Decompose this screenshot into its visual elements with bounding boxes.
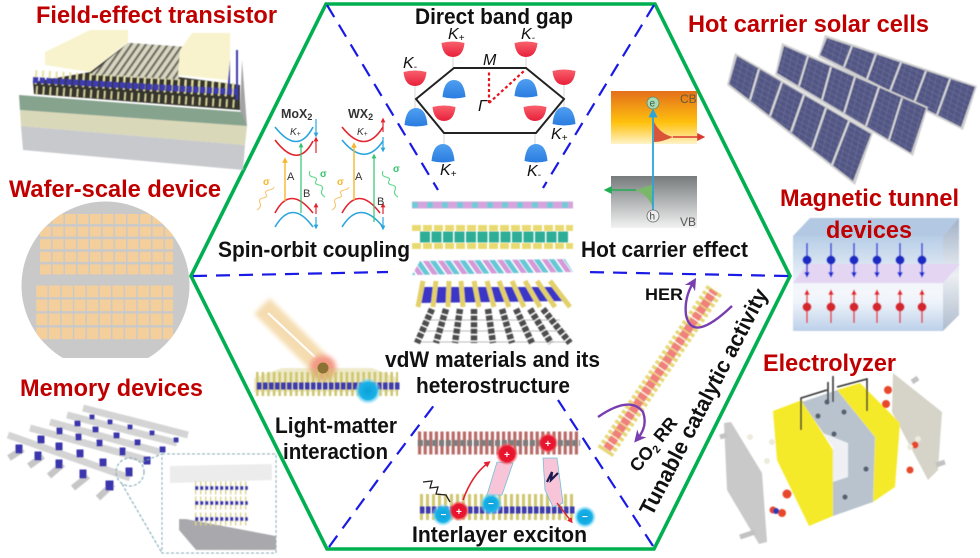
diagram: spin-orbit band structure: σ [320, 169, 327, 180]
title: memory devices: Memory devices [20, 375, 203, 402]
label: HER: HER [645, 285, 683, 304]
diagram: spin-orbit band structure: + [364, 131, 368, 138]
diagram: interlayer exciton: + [545, 439, 551, 450]
heading: hot carrier effect: Hot carrier effect [581, 237, 749, 262]
title: magnetic tunnel devices [780, 185, 959, 244]
hexagon frame [191, 4, 790, 549]
diagram: spin-orbit band structure: K [357, 127, 364, 138]
illustration: memory crossbar [8, 408, 276, 553]
title: magnetic tunnel devices: Magnetic tunnel [780, 185, 959, 212]
diagram: spin-orbit band structure: MoX [281, 107, 307, 121]
diagram: spin-orbit band structure [257, 107, 400, 228]
title: wafer-scale device: Wafer-scale device [9, 176, 221, 203]
diagram: spin-orbit band structure: A [355, 171, 363, 183]
illustration: magnetic tunnel device [793, 218, 960, 331]
diagram: spin-orbit band structure: 2 [368, 112, 373, 122]
title: electrolyzer: Electrolyzer [763, 350, 896, 377]
diagram: interlayer exciton: − [488, 499, 494, 510]
diagram: catalytic nanoribbon [598, 283, 732, 452]
diagram: Brillouin zone with valleys: K [551, 126, 562, 143]
diagram: spin-orbit band structure: WX [348, 107, 368, 121]
diagram: spin-orbit band structure: 2 [307, 112, 312, 122]
diagram: spin-orbit band structure: σ [393, 164, 400, 175]
diagram: spin-orbit band structure: B [377, 196, 384, 208]
diagram: spin-orbit band structure: σ [337, 177, 344, 188]
diagram: Brillouin zone with valleys: + [562, 133, 568, 144]
heading: interlayer exciton: Interlayer exciton [412, 522, 587, 547]
label: CO2 RR: CO [626, 442, 658, 476]
label: CO2 RR: 2 [650, 443, 664, 456]
title: field-effect transistor: Field-effect transistor [36, 2, 277, 29]
diagram: vdW heterostructure stack [412, 205, 573, 343]
diagram: Brillouin zone with valleys: K [403, 55, 414, 72]
diagram: hot carrier effect: h [650, 212, 655, 222]
illustration: electrolyzer [720, 373, 945, 544]
diagram: Brillouin zone with valleys: - [532, 33, 536, 44]
heading: tunable catalytic activity: Tunable catalytic activity [634, 284, 773, 519]
diagram: interlayer exciton [418, 433, 596, 528]
diagram: interlayer exciton: − [440, 510, 446, 521]
diagram: Brillouin zone with valleys [403, 26, 576, 181]
diagram: Brillouin zone with valleys: + [459, 33, 465, 44]
diagram: hot carrier effect [607, 91, 702, 229]
diagram: Brillouin zone with valleys: - [414, 62, 418, 73]
heading: direct band gap: Direct band gap [415, 4, 573, 29]
diagram: Brillouin zone with valleys: Γ [478, 98, 488, 115]
heading: vdW materials and its heterostructure: heterostructure [416, 373, 570, 398]
diagram: Brillouin zone with valleys: K [521, 26, 532, 43]
heading: vdW materials and its heterostructure [385, 347, 600, 398]
title: magnetic tunnel devices: devices [826, 217, 912, 244]
illustration: field-effect transistor [19, 30, 247, 170]
label: CO2 RR: RR [646, 413, 681, 450]
diagram: spin-orbit band structure: K [290, 127, 297, 138]
diagram: Brillouin zone with valleys: + [451, 169, 457, 180]
diagram: spin-orbit band structure: A [287, 171, 295, 183]
diagram: hot carrier effect: CB [680, 92, 697, 106]
diagram: interlayer exciton: − [582, 512, 588, 523]
diagram: hot carrier effect: VB [680, 215, 696, 229]
illustration: wafer [22, 202, 190, 358]
diagram: Brillouin zone with valleys: K [448, 26, 459, 43]
diagram: Brillouin zone with valleys: - [538, 170, 542, 181]
diagram: light-matter interaction [254, 306, 400, 404]
heading: vdW materials and its heterostructure: vdW materials and its [385, 347, 600, 372]
illustration: solar panels [727, 35, 977, 185]
diagram: spin-orbit band structure: σ [263, 177, 270, 188]
diagram: spin-orbit band structure: + [297, 131, 301, 138]
title: hot carrier solar cells: Hot carrier solar cells [688, 11, 929, 38]
diagram: spin-orbit band structure: B [303, 188, 310, 200]
diagram: hot carrier effect: e [650, 98, 656, 110]
heading: light-matter interaction: Light-matter [275, 413, 397, 438]
diagram: interlayer exciton: + [456, 507, 462, 518]
heading: light-matter interaction [275, 413, 397, 464]
diagram: Brillouin zone with valleys: M [483, 52, 497, 69]
heading: spin-orbit coupling: Spin-orbit coupling [218, 237, 410, 262]
diagram: interlayer exciton: + [504, 450, 510, 461]
diagram: Brillouin zone with valleys: K [440, 162, 451, 179]
diagram: Brillouin zone with valleys: K [527, 163, 538, 180]
heading: light-matter interaction: interaction [283, 439, 388, 464]
